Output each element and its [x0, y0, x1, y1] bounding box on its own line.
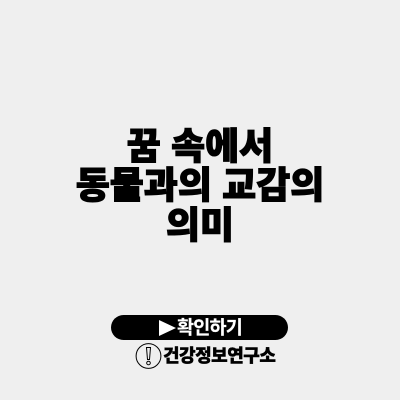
button: 확인하기: 확인하기 [177, 317, 242, 338]
title: 꿈 속에서 [127, 126, 273, 167]
button: 확인하기 [111, 315, 288, 340]
title: 동물과의 교감의 [76, 165, 324, 206]
icon: exclamation circle [136, 343, 162, 369]
title [76, 126, 324, 246]
title: 의미 [166, 205, 234, 246]
brand name: 건강정보연구소 [163, 346, 275, 366]
